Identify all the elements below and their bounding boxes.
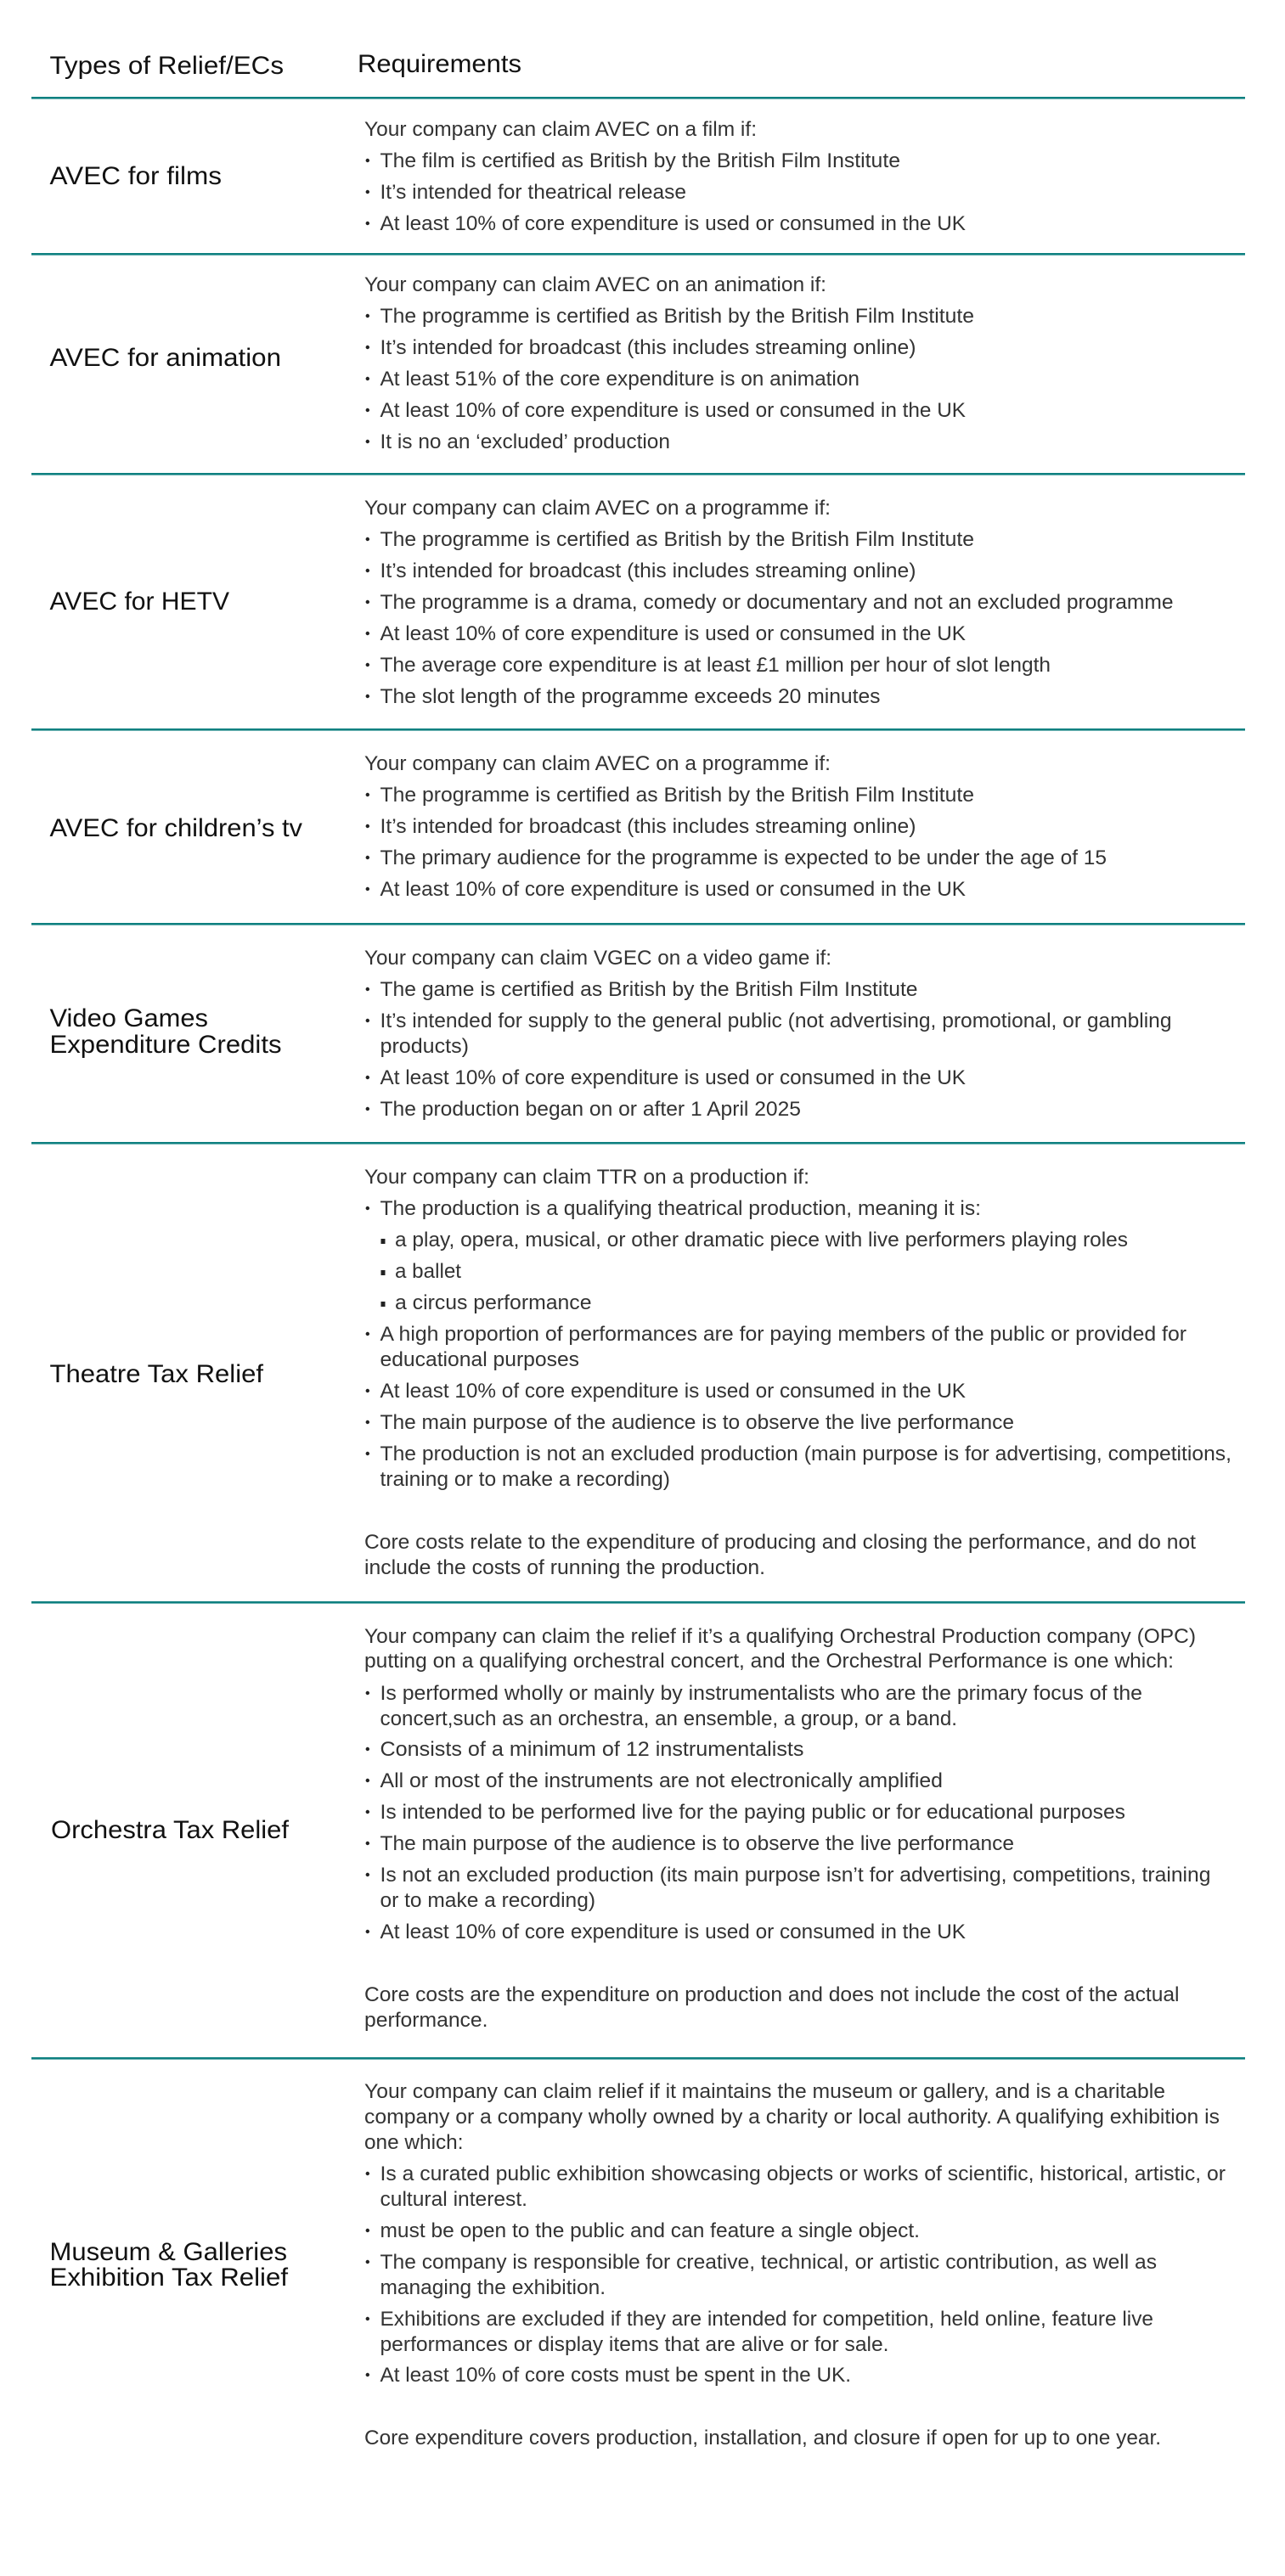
relief type: AVEC for HETV: AVEC for HETV <box>49 588 229 616</box>
requirements: Museum and Galleries Exhibition Tax Relief: must be open to the public and can feature a single object. <box>380 2219 920 2242</box>
panel: Museum and Galleries Exhibition Tax Relief <box>49 2080 1226 2449</box>
requirements: Video Games Expenditure Credits: The production began on or after 1 April 2025 <box>380 1098 801 1121</box>
requirements: Theatre Tax Relief: Core costs relate to the expenditure of producing and closing the performance, and do not <box>364 1531 1196 1554</box>
requirements: Museum and Galleries Exhibition Tax Relief: At least 10% of core costs must be spent in the UK. <box>380 2364 851 2387</box>
requirements: Museum and Galleries Exhibition Tax Relief: Core expenditure covers production, installation, and closure if open for up to one year. <box>364 2427 1161 2449</box>
table header row <box>49 50 521 80</box>
relief type: AVEC for animation: AVEC for animation <box>49 344 281 372</box>
relief type: Museum and Galleries Exhibition Tax Relief: Exhibition Tax Relief <box>49 2264 289 2292</box>
relief type: Museum and Galleries Exhibition Tax Relief <box>49 2238 289 2292</box>
requirements: Theatre Tax Relief: include the costs of running the production. <box>364 1556 765 1579</box>
requirements: Theatre Tax Relief: a ballet <box>395 1260 461 1283</box>
requirements: AVEC for HETV: Your company can claim AVEC on a programme if: <box>364 497 831 520</box>
requirements: Orchestra Tax Relief: Your company can claim the relief if it’s a qualifying Orchestral Production company (OPC) <box>364 1625 1196 1648</box>
requirements: Theatre Tax Relief <box>364 1166 1231 1579</box>
requirements: Museum and Galleries Exhibition Tax Relief: cultural interest. <box>380 2188 527 2211</box>
requirements: AVEC for films: At least 10% of core expenditure is used or consumed in the UK <box>380 212 966 235</box>
requirements: Theatre Tax Relief: educational purposes <box>380 1348 579 1371</box>
panel: Video Games Expenditure Credits <box>49 947 1172 1121</box>
requirements: AVEC for children's tv: It’s intended for broadcast (this includes streaming online) <box>380 815 916 838</box>
requirements: Orchestra Tax Relief: Is intended to be performed live for the paying public or for educational purposes <box>380 1801 1125 1824</box>
requirements: Museum and Galleries Exhibition Tax Relief: one which: <box>364 2131 464 2154</box>
requirements: AVEC for children's tv <box>364 752 1107 901</box>
requirements: AVEC for animation: At least 10% of core expenditure is used or consumed in the UK <box>380 399 966 422</box>
panel: Orchestra Tax Relief <box>51 1625 1211 2032</box>
requirements: Theatre Tax Relief: The main purpose of the audience is to observe the live performance <box>380 1411 1014 1434</box>
requirements: Theatre Tax Relief: At least 10% of core expenditure is used or consumed in the UK <box>380 1380 966 1403</box>
requirements: Museum and Galleries Exhibition Tax Relief: The company is responsible for creative, technical, or artistic contribution, as well as <box>380 2251 1157 2274</box>
requirements: Video Games Expenditure Credits: Your company can claim VGEC on a video game if: <box>364 947 831 970</box>
requirements: Orchestra Tax Relief: At least 10% of core expenditure is used or consumed in the UK <box>380 1921 966 1943</box>
requirements: Orchestra Tax Relief: Is not an excluded production (its main purpose isn’t for advertising, competitions, training <box>380 1864 1211 1887</box>
relief type: Orchestra Tax Relief: Orchestra Tax Relief <box>51 1816 290 1844</box>
requirements: AVEC for HETV: The programme is a drama, comedy or documentary and not an excluded programme <box>380 591 1174 614</box>
requirements: Museum and Galleries Exhibition Tax Relief: performances or display items that are alive or for sale. <box>380 2333 888 2356</box>
requirements: Orchestra Tax Relief: concert,such as an orchestra, an ensemble, a group, or a band. <box>380 1707 957 1730</box>
relief type: AVEC for children's tv: AVEC for children’s tv <box>49 814 302 842</box>
requirements: AVEC for children's tv: The programme is certified as British by the British Film Institute <box>380 784 974 807</box>
requirements: AVEC for HETV: It’s intended for broadcast (this includes streaming online) <box>380 560 916 582</box>
requirements: AVEC for HETV: The average core expenditure is at least £1 million per hour of slot length <box>380 654 1051 677</box>
requirements: AVEC for films: It’s intended for theatrical release <box>380 181 686 204</box>
panel: AVEC for films <box>49 118 966 235</box>
panel: AVEC for HETV <box>49 497 1174 708</box>
requirements: Museum and Galleries Exhibition Tax Relief: managing the exhibition. <box>380 2276 606 2299</box>
requirements: AVEC for animation: It is no an ‘excluded’ production <box>380 430 670 453</box>
requirements: Orchestra Tax Relief: Consists of a minimum of 12 instrumentalists <box>380 1738 803 1761</box>
requirements: Orchestra Tax Relief: putting on a qualifying orchestral concert, and the Orchestral Performance is one which: <box>364 1650 1174 1673</box>
requirements: AVEC for HETV: The slot length of the programme exceeds 20 minutes <box>380 685 880 708</box>
requirements: Orchestra Tax Relief: performance. <box>364 2009 488 2032</box>
requirements: Museum and Galleries Exhibition Tax Relief: Exhibitions are excluded if they are intended for competition, held online, feature live <box>380 2308 1153 2331</box>
requirements: Theatre Tax Relief: training or to make a recording) <box>380 1468 670 1491</box>
requirements: Orchestra Tax Relief: Core costs are the expenditure on production and does not include the cost of the actual <box>364 1983 1179 2006</box>
requirements: Museum and Galleries Exhibition Tax Relief: Is a curated public exhibition showcasing objects or works of scientific, historical, artistic, or <box>380 2163 1226 2185</box>
requirements: Orchestra Tax Relief: Is performed wholly or mainly by instrumentalists who are the primary focus of the <box>380 1682 1142 1705</box>
requirements: AVEC for HETV: At least 10% of core expenditure is used or consumed in the UK <box>380 622 966 645</box>
relief type: Theatre Tax Relief: Theatre Tax Relief <box>49 1360 264 1388</box>
requirements: Video Games Expenditure Credits: The game is certified as British by the British Film Institute <box>380 978 917 1001</box>
panel: Theatre Tax Relief <box>49 1166 1231 1579</box>
requirements: Video Games Expenditure Credits <box>364 947 1172 1121</box>
requirements: Video Games Expenditure Credits: It’s intended for supply to the general public (not advertising, promotional, or gambling <box>380 1010 1172 1032</box>
requirements: AVEC for animation <box>364 273 974 453</box>
relief type: Video Games Expenditure Credits: Expenditure Credits <box>49 1031 282 1059</box>
requirements: Orchestra Tax Relief: All or most of the instruments are not electronically amplified <box>380 1769 943 1792</box>
requirements: AVEC for animation: Your company can claim AVEC on an animation if: <box>364 273 826 296</box>
requirements: Museum and Galleries Exhibition Tax Relief: company or a company wholly owned by a charity or local authority. A qualifying exhibition is <box>364 2106 1220 2129</box>
requirements: Theatre Tax Relief: The production is not an excluded production (main purpose is for advertising, competitions, <box>380 1443 1231 1465</box>
requirements: Orchestra Tax Relief: The main purpose of the audience is to observe the live performance <box>380 1832 1014 1855</box>
requirements: Theatre Tax Relief: The production is a qualifying theatrical production, meaning it is: <box>380 1197 981 1220</box>
requirements: AVEC for films: The film is certified as British by the British Film Institute <box>380 149 900 172</box>
requirements: Theatre Tax Relief: a circus performance <box>395 1291 591 1314</box>
requirements: AVEC for HETV: The programme is certified as British by the British Film Institute <box>380 528 974 551</box>
relief type: Video Games Expenditure Credits <box>49 1004 282 1059</box>
requirements: Museum and Galleries Exhibition Tax Relief: Your company can claim relief if it maintains the museum or gallery, and is a charitable <box>364 2080 1165 2103</box>
requirements: AVEC for animation: It’s intended for broadcast (this includes streaming online) <box>380 336 916 359</box>
relief type: Museum and Galleries Exhibition Tax Relief: Museum & Galleries <box>49 2238 287 2266</box>
column heading: requirements: Requirements <box>358 50 521 78</box>
requirements: AVEC for HETV <box>364 497 1174 708</box>
requirements: AVEC for children's tv: The primary audience for the programme is expected to be under the age of 15 <box>380 846 1107 869</box>
requirements: Orchestra Tax Relief <box>364 1625 1211 2032</box>
relief type: Video Games Expenditure Credits: Video Games <box>49 1004 208 1032</box>
requirements: Museum and Galleries Exhibition Tax Relief <box>364 2080 1226 2449</box>
requirements: Video Games Expenditure Credits: products) <box>380 1035 469 1058</box>
requirements: AVEC for animation: At least 51% of the core expenditure is on animation <box>380 368 859 391</box>
requirements: Theatre Tax Relief: Your company can claim TTR on a production if: <box>364 1166 809 1189</box>
requirements: AVEC for children's tv: Your company can claim AVEC on a programme if: <box>364 752 831 775</box>
panel: AVEC for animation <box>49 273 974 453</box>
panel: AVEC for children's tv <box>49 752 1107 901</box>
requirements: AVEC for films: Your company can claim AVEC on a film if: <box>364 118 757 141</box>
requirements: Orchestra Tax Relief: or to make a recording) <box>380 1889 595 1912</box>
requirements: Video Games Expenditure Credits: At least 10% of core expenditure is used or consumed in the UK <box>380 1066 966 1089</box>
requirements: Theatre Tax Relief: a play, opera, musical, or other dramatic piece with live performers playing roles <box>395 1229 1128 1251</box>
requirements: AVEC for children's tv: At least 10% of core expenditure is used or consumed in the UK <box>380 878 966 901</box>
relief type: AVEC for films: AVEC for films <box>49 162 222 190</box>
column heading: types of relief: Types of Relief/ECs <box>49 52 284 80</box>
requirements: AVEC for films <box>364 118 966 235</box>
requirements: Theatre Tax Relief: A high proportion of performances are for paying members of the public or provided for <box>380 1323 1186 1346</box>
requirements: AVEC for animation: The programme is certified as British by the British Film Institute <box>380 305 974 328</box>
